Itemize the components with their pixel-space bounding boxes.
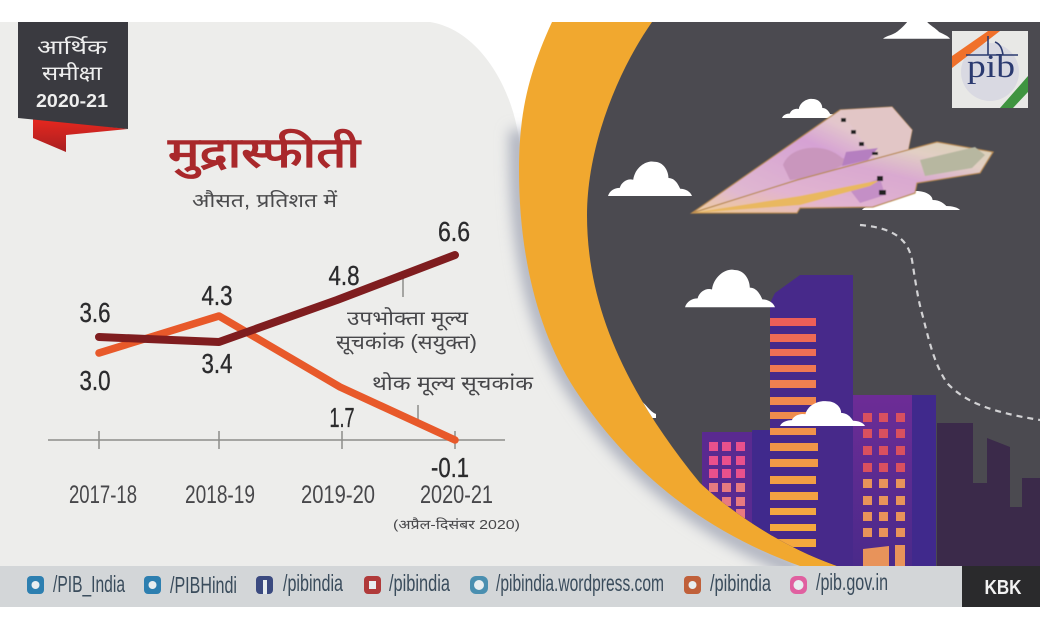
dashed flight path: [860, 225, 1040, 420]
x axis labels: [69, 481, 520, 532]
icon: PIB logo: [952, 31, 1028, 108]
badge text: आर्थिक: [37, 36, 108, 59]
panel: right dark sky with yellow arc: [518, 22, 1040, 570]
x axis labels: 2019-20: [301, 481, 375, 509]
social icons: [27, 576, 807, 594]
social handles: /pibindia.wordpress.com: [496, 570, 664, 596]
icon: clouds: [608, 22, 960, 426]
social handles: /pib.gov.in: [816, 569, 888, 595]
social handles: [53, 569, 888, 598]
x axis labels: (अप्रैल-दिसंबर 2020): [393, 517, 520, 532]
small cloud behind arc: [642, 402, 656, 418]
line chart: [48, 216, 534, 532]
x axis labels: 2020-21: [420, 481, 493, 509]
far dark skyline: [937, 423, 1040, 566]
data labels: 3.0: [80, 365, 110, 396]
social handles: /PIB_India: [53, 571, 125, 597]
series label: consumer price index: सूचकांक (सयुक्त): [336, 332, 477, 355]
left building: [702, 430, 772, 536]
subtitle: औसत, प्रतिशत में: [192, 189, 338, 212]
data labels: 4.8: [328, 260, 360, 291]
social handles: /pibindia: [283, 570, 343, 596]
axis: [48, 278, 505, 449]
credit box: KBK: KBK: [984, 577, 1022, 599]
dark sky: [587, 22, 1040, 566]
data labels: 6.6: [438, 216, 470, 247]
badge: economic survey: [18, 22, 128, 152]
data labels: 4.3: [202, 280, 232, 311]
series: wholesale price index: [99, 316, 455, 440]
data labels: [80, 216, 470, 483]
logo wordmark: pib: [967, 49, 1015, 85]
social handles: /pibindia: [389, 570, 450, 596]
tall central building: [770, 275, 853, 566]
data labels: 1.7: [330, 402, 354, 433]
x axis labels: 2018-19: [185, 481, 255, 509]
series label: consumer price index: उपभोक्ता मूल्य: [347, 307, 468, 331]
social handles: /pibindia: [710, 570, 771, 596]
badge: economic survey: 2020-21: [36, 91, 108, 111]
social handles: /PIBHindi: [170, 572, 237, 598]
data labels: -0.1: [431, 452, 469, 483]
series label: consumer price index: [336, 307, 477, 355]
credit box: KBK: [962, 566, 1040, 607]
series label: wholesale price index: थोक मूल्य सूचकांक: [372, 372, 534, 396]
yellow arc: [519, 22, 840, 566]
data labels: 3.6: [80, 297, 110, 328]
title: मुद्रास्फीती: [167, 128, 363, 179]
footer bar: [0, 566, 962, 607]
city skyline illustration: [625, 275, 1040, 566]
badge: economic survey: समीक्षा: [42, 62, 103, 85]
right building: [853, 395, 936, 566]
ribbon: [33, 118, 128, 152]
series: consumer price index: [99, 255, 455, 342]
x axis labels: 2017-18: [69, 481, 137, 509]
icon: paper plane made of rupee notes: [692, 107, 993, 213]
panel: left chart background: [0, 22, 800, 566]
data labels: 3.4: [202, 348, 232, 379]
